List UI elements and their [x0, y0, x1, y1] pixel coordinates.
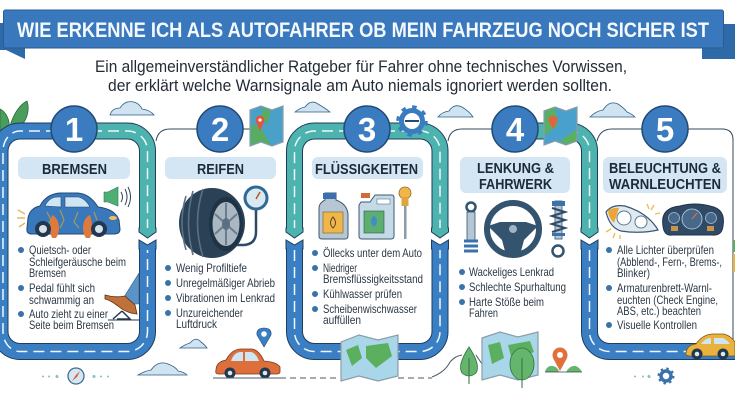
icon: headlight: [606, 204, 660, 239]
icon: orange car: [216, 349, 280, 378]
panel 3: heading: FLÜSSIGKEITEN: [315, 161, 418, 178]
panel 4: bullet list: Harte Stöße beim: [469, 295, 544, 309]
panel 5: bullet list: Alle Lichter überprüfen: [617, 243, 714, 257]
panel 1: bullet list: Auto zieht zu einer: [29, 307, 108, 321]
subtitle: der erklärt welche Warnsignale am Auto niemals ignoriert werden sollten.: [108, 77, 612, 95]
panel 1: heading: [18, 157, 130, 179]
icon: dashboard: [663, 204, 723, 235]
thin panel outlines: [156, 129, 733, 345]
step number 3: 3: [358, 111, 376, 148]
icon: gear near step 3: [398, 107, 426, 135]
panel 3: bullet list: Öllecks unter dem Auto: [323, 246, 422, 260]
panel 5: bullet list: Visuelle Kontrollen: [617, 318, 697, 332]
step number 3: [344, 106, 390, 152]
icon: leaves top left: [0, 101, 28, 130]
panel 3: bullet list: Niedriger: [323, 261, 357, 275]
panel 3: heading: [312, 157, 423, 179]
panel 4: bullet list: Schlechte Spurhaltung: [469, 280, 566, 294]
panel 5: bullet list: Armaturenbrett-Warnl-: [617, 281, 712, 295]
panel 3: bullet list: Kühlwasser prüfen: [323, 287, 402, 301]
panel 4: bullet list: [459, 265, 566, 320]
subtitle: Ein allgemeinverständlicher Ratgeber für Fahrer ohne technisches Vorwissen,: [95, 58, 627, 76]
panel 2: bullet list: [165, 261, 275, 331]
icon: world map: [341, 335, 398, 381]
panel 1: bullet list: Schleifgeräusche beim: [29, 255, 126, 269]
step number 2: 2: [211, 111, 229, 148]
panel 4 and 5: road frame: [515, 131, 735, 352]
icon: blue location pin: [257, 328, 271, 347]
icon: steering wheel, tie rod, shock absorber: [464, 201, 565, 256]
step number 5: [642, 106, 688, 152]
panel 1: bullet list: Quietsch- oder: [29, 243, 91, 257]
panel 4: heading: [460, 157, 570, 193]
icon: tire with pressure gauge: [179, 187, 267, 258]
icon: yellow car: [686, 334, 735, 360]
step number 4: 4: [506, 111, 525, 148]
panel 5: bullet list: Blinker): [617, 266, 650, 280]
subtitle: [95, 58, 627, 95]
panel 3: bullet list: [312, 246, 423, 327]
icon: foot on brake pedal: [105, 273, 139, 320]
panel 1: bullet list: schwammig an: [29, 293, 94, 307]
dashed road line: [213, 355, 482, 378]
step number 2: [197, 106, 243, 152]
panel 3: bullet list: Bremsflüssigkeitsstand: [323, 272, 423, 286]
step number 4: [492, 106, 538, 152]
panel 5: heading: BELEUCHTUNG &: [609, 161, 721, 177]
step number 5: 5: [656, 111, 674, 148]
icon: blue car with brakes: [17, 193, 120, 238]
panel 2: bullet list: Vibrationen im Lenkrad: [176, 291, 275, 305]
panel 2: heading: [165, 157, 276, 179]
panel 5: heading: [603, 157, 727, 193]
panel 1: bullet list: Seite beim Bremsen: [29, 318, 114, 332]
panel 3: bullet list: Scheibenwischwasser: [323, 302, 417, 316]
panel 4: heading: FAHRWERK: [479, 177, 552, 193]
panel 5: bullet list: [606, 243, 722, 332]
icon: bottles and dipstick: [319, 187, 411, 239]
panel 2: bullet list: Unzureichender: [176, 306, 243, 320]
panel 1: heading: BREMSEN: [42, 162, 107, 178]
panel 1: road frame: [0, 131, 156, 352]
panel 2: heading: REIFEN: [197, 162, 244, 178]
icon: map with trees and pin: [461, 332, 582, 388]
panel 4: heading: LENKUNG &: [477, 161, 554, 177]
icon: gear with dots: [634, 368, 674, 384]
clouds: [110, 102, 635, 375]
panel 1: bullet list: [18, 243, 126, 332]
step number 1: [51, 106, 97, 152]
icon: map near step 4: [544, 107, 577, 145]
icon: compass with dots: [42, 368, 109, 384]
panel 1: bullet list: Pedal fühlt sich: [29, 281, 95, 295]
title banner: [0, 10, 735, 59]
panel 1: bullet list: Bremsen: [29, 266, 66, 280]
panel 4: bullet list: Wackeliges Lenkrad: [469, 265, 554, 279]
icon: map edge at right: [733, 240, 735, 272]
panel 2: bullet list: Wenig Profiltiefe: [176, 261, 247, 275]
panel 2: bullet list: Luftdruck: [176, 317, 218, 331]
panel 5: bullet list: ABS, etc.) beachten: [617, 304, 701, 318]
icon: speaker sound: [104, 187, 130, 207]
panel 3: road frame: [286, 131, 448, 352]
panel 2: bullet list: Unregelmäßiger Abrieb: [176, 276, 275, 290]
panel 4: bullet list: Fahren: [469, 306, 498, 320]
panel 3: bullet list: auffüllen: [323, 313, 361, 327]
icon: map near step 2: [250, 106, 283, 146]
step number 1: 1: [65, 111, 83, 148]
panel 5: heading: WARNLEUCHTEN: [609, 177, 721, 193]
